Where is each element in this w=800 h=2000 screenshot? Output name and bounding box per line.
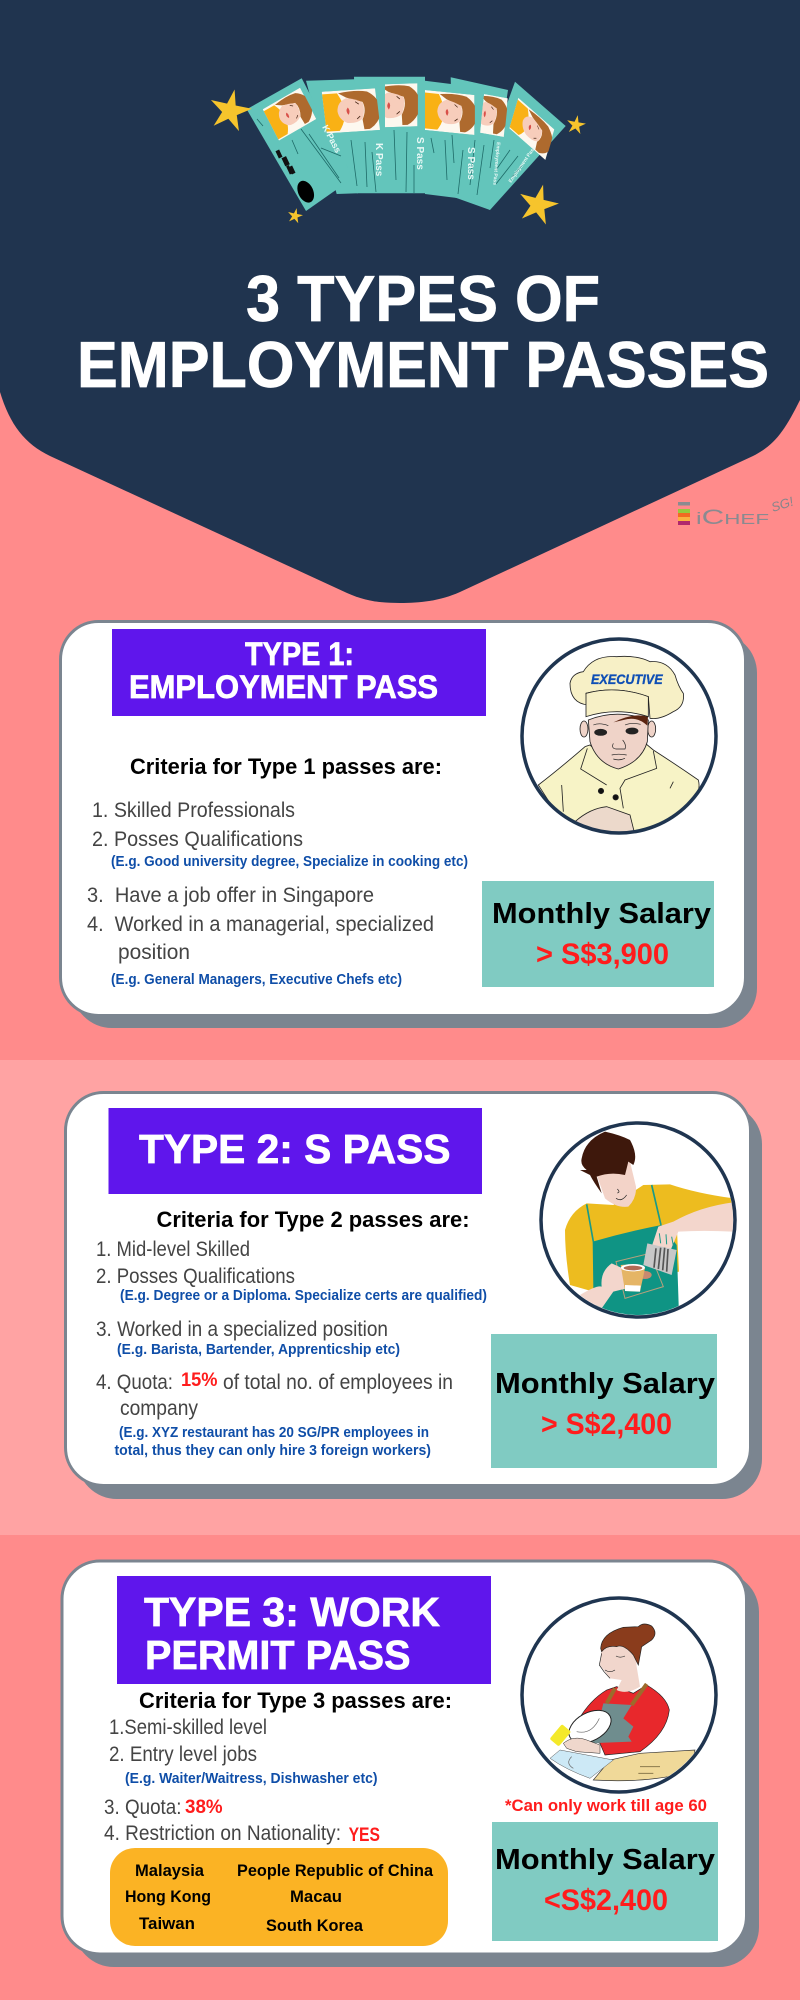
background: upper pink band	[0, 0, 800, 1060]
title	[77, 262, 769, 401]
header: navy banner	[0, 0, 800, 603]
icon: fan of employment pass cards with stars: S Pass	[465, 147, 476, 180]
salary box: Monthly Salary	[492, 898, 711, 930]
criteria list: 4. Restriction on Nationality:	[104, 1822, 341, 1845]
heading: type 1: TYPE 1:	[245, 636, 354, 672]
heading: type 3	[117, 1576, 491, 1684]
card body	[62, 1561, 746, 1954]
salary box: Monthly Salary	[495, 1844, 715, 1876]
criteria list: 3. Worked in a specialized position	[96, 1318, 388, 1341]
heading: type 3: PERMIT PASS	[145, 1632, 410, 1678]
criteria list: company	[120, 1397, 198, 1420]
salary box	[491, 1334, 717, 1468]
nationality list box: South Korea	[266, 1916, 364, 1935]
criteria list: Criteria for Type 1 passes are:	[130, 754, 442, 779]
card body	[66, 1092, 750, 1486]
illustration: dishwasher	[522, 1598, 716, 1792]
criteria list: (E.g. Good university degree, Specialize in cooking etc)	[111, 854, 468, 870]
salary box: <S$2,400	[544, 1884, 668, 1917]
criteria list: (E.g. XYZ restaurant has 20 SG/PR employees in	[119, 1425, 429, 1441]
salary box: Monthly Salary	[495, 1368, 715, 1400]
heading: type 2	[108, 1108, 482, 1194]
criteria list: 38%	[185, 1797, 223, 1818]
criteria list: (E.g. Waiter/Waitress, Dishwasher etc)	[125, 1771, 378, 1787]
heading: type 2: TYPE 2: S PASS	[139, 1126, 450, 1172]
nationality list box: Hong Kong	[125, 1887, 211, 1906]
criteria list: (E.g. Degree or a Diploma. Specialize certs are qualified)	[120, 1288, 487, 1304]
panel: type 2 s pass	[66, 1092, 762, 1499]
icon: fan of employment pass cards with stars: K Pass	[320, 123, 343, 154]
title: EMPLOYMENT PASSES	[77, 328, 769, 401]
icon: fan of employment pass cards with stars	[206, 77, 587, 226]
criteria list: of total no. of employees in	[223, 1371, 453, 1394]
salary box: > S$3,900	[536, 938, 669, 971]
nationality list box: People Republic of China	[237, 1861, 434, 1880]
nationality list box: Taiwan	[139, 1914, 195, 1933]
criteria list: 1. Skilled Professionals	[92, 799, 295, 822]
background: middle light pink band	[0, 1060, 800, 1535]
age limit note: *Can only work till age 60	[505, 1796, 707, 1815]
criteria list: 4. Quota:	[96, 1371, 173, 1394]
card body	[60, 622, 746, 1016]
criteria list: 4. Worked in a managerial, specialized	[87, 913, 434, 936]
criteria list: 1.Semi-skilled level	[109, 1716, 267, 1739]
salary box	[492, 1822, 718, 1941]
title: 3 TYPES OF	[246, 262, 600, 335]
card shadow	[72, 633, 757, 1028]
icon: fan of employment pass cards with stars: Employment Pass	[508, 145, 537, 184]
panel: type 3 work permit pass	[62, 1561, 759, 1967]
logo: iChef SG	[678, 494, 796, 529]
illustration: executive chef	[522, 639, 716, 835]
criteria list	[96, 1207, 487, 1459]
criteria list: (E.g. Barista, Bartender, Apprenticship etc)	[117, 1342, 400, 1358]
stars	[206, 85, 587, 226]
heading: type 1	[112, 629, 486, 716]
icon: fan of employment pass cards with stars: S Pass	[414, 137, 425, 170]
criteria list: position	[118, 941, 190, 964]
nationality list box: Macau	[290, 1887, 342, 1906]
card shadow	[74, 1572, 759, 1967]
card shadow	[77, 1104, 762, 1499]
illustration: executive chef: EXECUTIVE	[591, 671, 663, 687]
salary box	[482, 881, 714, 987]
criteria list: 1. Mid-level Skilled	[96, 1238, 250, 1261]
icon: fan of employment pass cards with stars: K Pass	[373, 143, 384, 177]
illustration: barista	[541, 1123, 735, 1317]
criteria list	[104, 1688, 452, 1846]
criteria list: 2. Posses Qualifications	[96, 1265, 295, 1288]
criteria list: 15%	[181, 1370, 218, 1391]
logo: iChef SG: SG!	[769, 494, 796, 515]
pass cards	[247, 77, 566, 211]
panel: type 1 employment pass	[60, 622, 757, 1028]
icon: fan of employment pass cards with stars: Employment Pass	[491, 142, 501, 185]
logo: iChef SG: iC HEF	[696, 506, 769, 529]
criteria list: 2. Posses Qualifications	[92, 828, 303, 851]
background: lower pink band	[0, 1535, 800, 2000]
criteria list	[87, 754, 468, 988]
criteria list: Criteria for Type 3 passes are:	[139, 1688, 452, 1713]
criteria list: 3. Quota:	[104, 1796, 182, 1819]
heading: type 3: TYPE 3: WORK	[144, 1589, 440, 1635]
nationality list box	[110, 1848, 448, 1946]
criteria list: total, thus they can only hire 3 foreign workers)	[114, 1443, 431, 1459]
criteria list: 3. Have a job offer in Singapore	[87, 884, 374, 907]
criteria list: Criteria for Type 2 passes are:	[156, 1207, 470, 1232]
criteria list: (E.g. General Managers, Executive Chefs etc)	[111, 972, 402, 988]
criteria list: YES	[349, 1825, 380, 1846]
salary box: > S$2,400	[541, 1408, 672, 1441]
criteria list: 2. Entry level jobs	[109, 1743, 257, 1766]
nationality list box: Malaysia	[135, 1861, 205, 1880]
heading: type 1: EMPLOYMENT PASS	[129, 669, 438, 705]
